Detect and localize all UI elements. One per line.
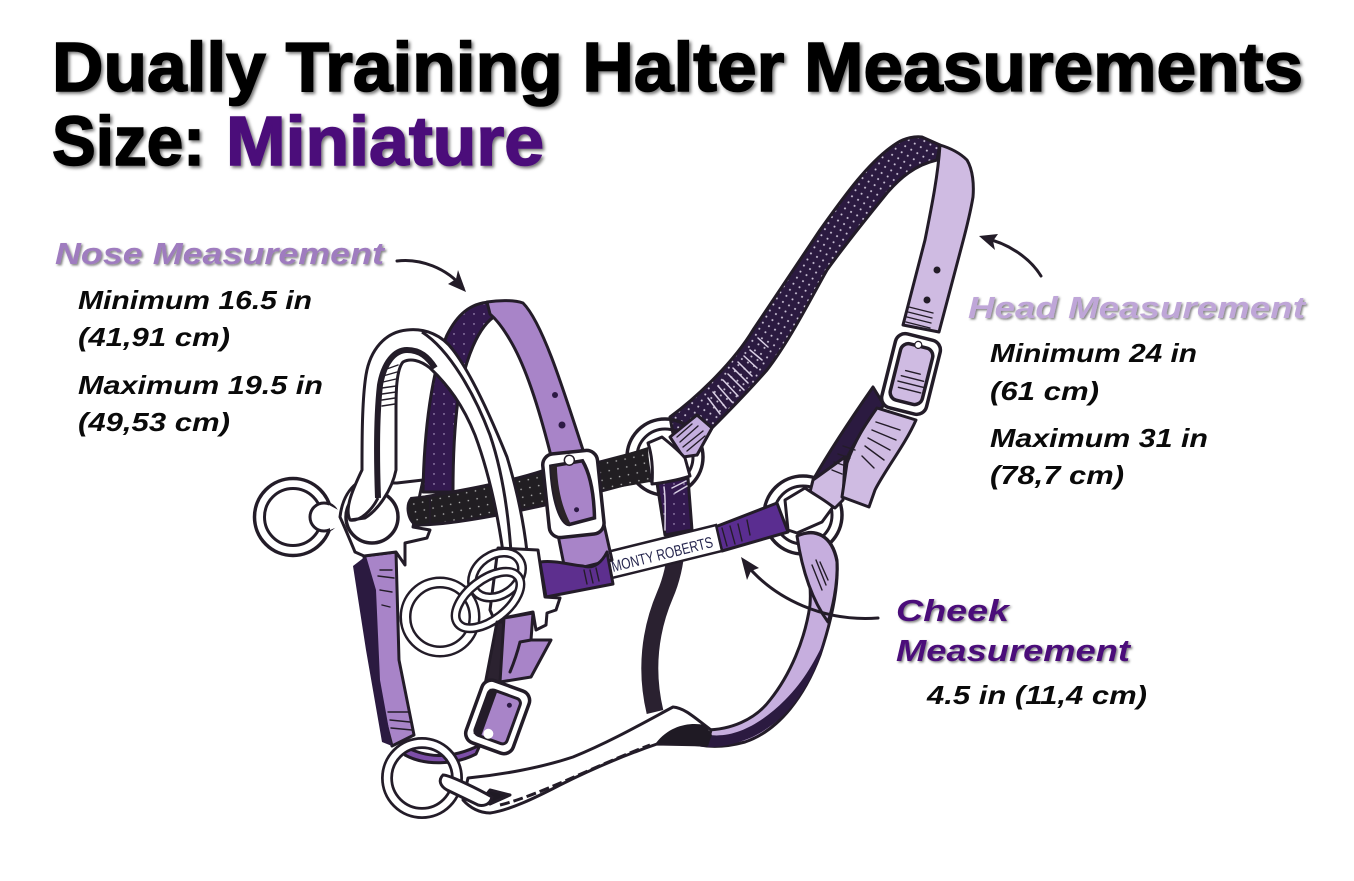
nose values: (49,53 cm) <box>78 407 230 437</box>
heading: cheek measurement <box>896 593 1132 668</box>
head strap: hatched end near ring <box>670 415 712 457</box>
chin strap dark shading <box>656 724 712 747</box>
white tab on top ring <box>648 437 690 484</box>
head strap: light outer side <box>903 145 973 332</box>
head values: Minimum 24 in <box>990 338 1197 368</box>
purple band through bottom ring <box>402 745 480 763</box>
cheek purple sleeve right <box>715 503 788 551</box>
head strap: white hatch on dark <box>708 338 768 414</box>
black strap over ring <box>600 447 650 490</box>
nose crown strap holes <box>552 392 566 428</box>
title <box>52 28 1303 180</box>
lower cheek dark shading <box>695 640 825 747</box>
chin strap stitching <box>500 745 650 805</box>
lower big ring <box>406 582 474 652</box>
lower hardware plate <box>490 548 560 630</box>
head strap hatching above buckle <box>906 307 933 328</box>
white tab on right ring <box>785 488 833 533</box>
left ring on hardware <box>346 491 398 543</box>
head strap: first light tail <box>810 457 845 508</box>
throat strap <box>650 480 677 712</box>
title: Size: <box>52 102 205 180</box>
head strap: lower hatching <box>862 422 900 468</box>
head values: Maximum 31 in <box>990 423 1208 453</box>
chin strap folded end <box>482 790 510 804</box>
bottom ring <box>387 743 457 813</box>
rope loop <box>348 330 527 552</box>
heading: nose measurement: Nose Measurement <box>55 236 386 271</box>
chin strap link over ring <box>440 775 492 805</box>
head strap holes <box>924 266 940 304</box>
arrow: nose <box>397 260 466 292</box>
heading: cheek measurement: Cheek <box>896 593 1011 628</box>
rope loop: centre band <box>377 350 435 498</box>
rope loop: arch line <box>422 332 511 552</box>
nose values: Minimum 16.5 in <box>78 285 312 315</box>
head strap: second light tail <box>842 408 916 507</box>
head values <box>990 338 1208 490</box>
heading: head measurement: Head Measurement <box>968 290 1307 325</box>
nose values <box>78 285 323 437</box>
lower link rings <box>446 543 531 639</box>
nose crown strap below buckle <box>557 520 612 570</box>
rope loop: hatching <box>382 365 398 406</box>
rope loop: end curve <box>350 498 378 520</box>
nose values: Maximum 19.5 in <box>78 370 323 400</box>
left big ring <box>254 478 332 556</box>
head values: (78,7 cm) <box>990 460 1124 490</box>
left cheek strap <box>364 552 414 746</box>
nose values: (41,91 cm) <box>78 322 230 352</box>
lower keeper strap <box>484 622 507 690</box>
name plate: MONTY ROBERTS <box>610 534 715 576</box>
throat strap top <box>657 478 692 535</box>
top ring <box>627 419 703 495</box>
title: Miniature <box>226 102 544 180</box>
nose crown strap: dark left side <box>423 302 497 492</box>
left link <box>310 503 342 531</box>
nose crown strap: light right side <box>487 301 583 460</box>
arrow: head <box>979 234 1041 276</box>
head values: (61 cm) <box>990 376 1099 406</box>
arrow: cheek <box>741 557 878 618</box>
right ring <box>764 476 842 554</box>
left hardware plate <box>340 480 430 565</box>
halter illustration <box>254 137 973 813</box>
chin strap <box>463 707 711 813</box>
lower cheek tab over ring <box>797 533 837 622</box>
head strap: dark inner side <box>670 137 940 455</box>
cheek value: 4.5 in (11,4 cm) <box>926 680 1147 710</box>
black cross strap <box>413 450 650 525</box>
heading: cheek measurement: Measurement <box>896 633 1132 668</box>
head strap: dark hatch lines <box>832 446 855 474</box>
head buckle <box>879 332 943 416</box>
title: Dually Training Halter Measurements <box>52 28 1303 106</box>
black cross strap end <box>408 496 430 526</box>
head strap: lower dark edge <box>813 387 884 480</box>
nose buckle <box>542 449 605 539</box>
cheek purple sleeve left <box>540 552 613 597</box>
lower cheek loop <box>700 532 837 746</box>
lower buckle <box>463 677 532 757</box>
